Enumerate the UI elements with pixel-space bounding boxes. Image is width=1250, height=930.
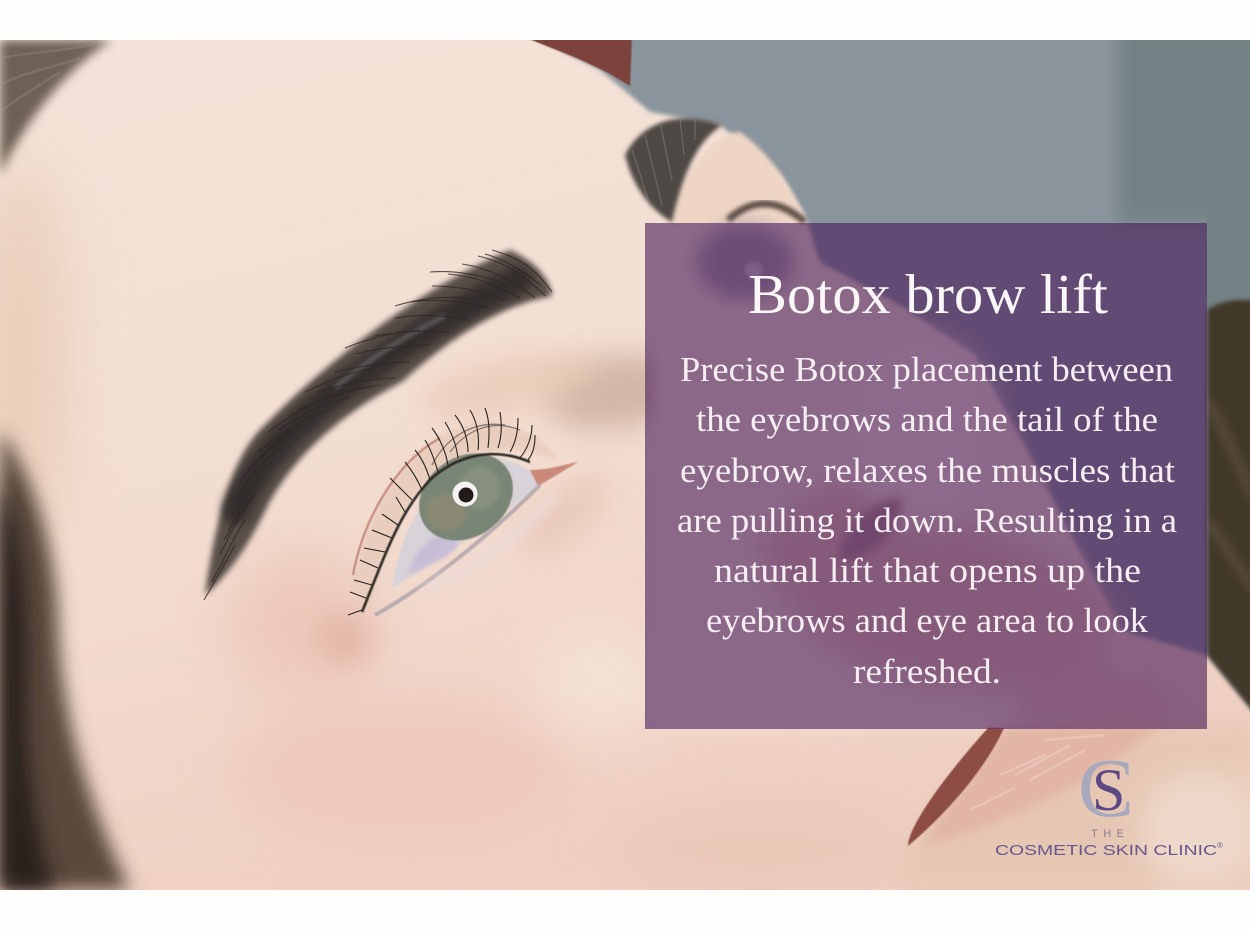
iris xyxy=(418,452,514,542)
upper lip pink xyxy=(1028,670,1124,720)
body text xyxy=(677,350,1177,691)
wall: darker teal section xyxy=(1114,40,1250,223)
nostril xyxy=(838,497,903,562)
logo wordmark name: COSMETIC SKIN CLINIC xyxy=(995,843,1217,859)
body text: refreshed. xyxy=(853,652,1001,691)
shading: inner eye crease xyxy=(524,477,606,552)
heading: Botox brow lift xyxy=(748,264,1108,326)
eyelashes xyxy=(348,408,535,615)
nose tip xyxy=(870,328,1000,522)
logo xyxy=(996,760,1223,855)
logo monogram S: S xyxy=(1092,757,1125,823)
pupil and catchlight xyxy=(452,482,478,506)
shading: cheek xyxy=(258,714,535,820)
body text: are pulling it down. Resulting in a xyxy=(677,501,1177,540)
nose under panel xyxy=(654,214,1124,730)
shading: eyelid warm tone xyxy=(426,348,580,422)
skin shading xyxy=(0,160,1250,900)
wall behind face xyxy=(520,30,1250,720)
shading: nose bridge shadow xyxy=(542,344,654,440)
body text: eyebrow, relaxes the muscles that xyxy=(680,451,1175,490)
logo monogram C: C xyxy=(1078,742,1134,835)
skin between far brow and eye xyxy=(668,132,805,225)
nose underside shadow xyxy=(760,484,1114,690)
shading: eye socket blush xyxy=(230,550,370,690)
shading: left temple tan xyxy=(0,160,70,560)
hair: right side xyxy=(1207,300,1250,720)
near eye xyxy=(348,408,578,615)
logo wordmark THE: THE xyxy=(1091,828,1124,840)
body text: natural lift that opens up the xyxy=(714,551,1141,590)
body text: the eyebrows and the tail of the xyxy=(696,400,1158,439)
eyelid fold xyxy=(358,424,556,594)
body text: eyebrows and eye area to look xyxy=(706,601,1149,640)
hair: left side xyxy=(0,430,130,890)
far eye socket xyxy=(697,224,793,300)
lips xyxy=(908,726,1160,846)
panel: purple translucent text box xyxy=(645,223,1207,729)
lid crease xyxy=(353,438,440,575)
nose bridge light xyxy=(654,362,1120,730)
inner corner xyxy=(530,462,578,486)
sclera xyxy=(392,457,545,588)
far eyebrow xyxy=(625,118,722,222)
upper lash line xyxy=(362,454,530,612)
hair: top left xyxy=(0,40,112,175)
far eye lashes xyxy=(728,204,805,222)
red-brown background object xyxy=(530,40,632,86)
body text: Precise Botox placement between xyxy=(680,350,1173,389)
near eyebrow xyxy=(204,250,552,600)
shading: chin and lower right skin xyxy=(900,720,1250,890)
lower lid xyxy=(375,485,540,615)
registered mark: ® xyxy=(1217,841,1223,850)
